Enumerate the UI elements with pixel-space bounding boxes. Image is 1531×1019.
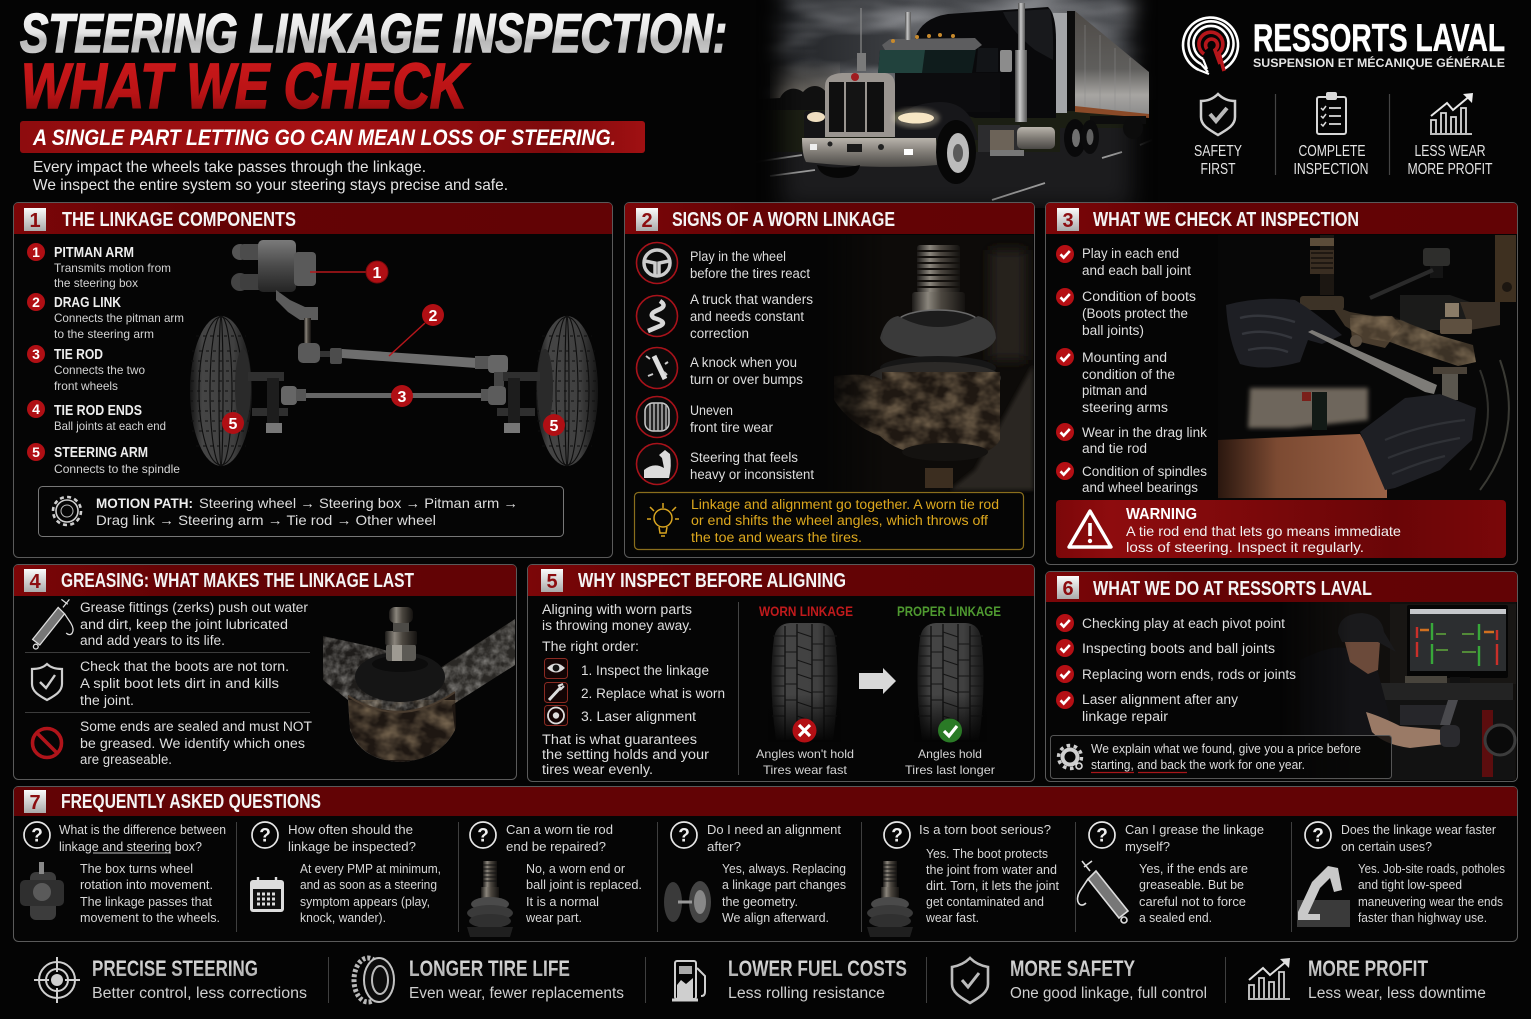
worn tire comparison: Tires wear fast <box>763 763 848 777</box>
faq 1: rotation into movement. <box>80 877 213 892</box>
faq 6 <box>1078 822 1264 925</box>
step 1: 1. Inspect the linkage <box>581 663 709 678</box>
faq 5: Is a torn boot serious? <box>919 822 1051 837</box>
worn tire comparison: WORN LINKAGE <box>759 603 853 619</box>
component list: Connects the two <box>54 363 145 377</box>
header benefit: safety first: FIRST <box>1200 161 1236 178</box>
tip: sealed ends warning: are greaseable. <box>80 752 172 767</box>
header photo: truck on highway <box>766 0 1149 208</box>
faq 6: careful not to force <box>1139 894 1246 909</box>
symptom: play in the wheel: Play in the wheel <box>690 249 786 264</box>
panel 3 header: 3 <box>1062 210 1074 232</box>
tip: sealed ends warning: be greased. We identify which ones <box>80 736 305 751</box>
component list: Ball joints at each end <box>54 419 166 433</box>
checklist: and each ball joint <box>1082 263 1191 278</box>
steering linkage diagram <box>190 240 598 466</box>
faq 3: end be repaired? <box>506 839 606 854</box>
faq 4: We align afterward. <box>722 910 829 925</box>
left text: That is what guarantees <box>542 732 697 747</box>
bottom benefit: lower fuel costs: Less rolling resistance <box>728 985 885 1002</box>
symptom: wanders: A truck that wanders <box>690 292 813 307</box>
component list: to the steering arm <box>54 327 154 341</box>
component list: front wheels <box>54 379 118 393</box>
services list: Laser alignment after any <box>1082 692 1238 707</box>
header benefit: complete inspection: INSPECTION <box>1294 161 1368 178</box>
panel 2 header: 2 <box>641 210 653 232</box>
services list: linkage repair <box>1082 709 1169 724</box>
tip: grease fittings: and add years to its life. <box>80 633 225 648</box>
faq 6: greaseable. But be <box>1139 877 1244 892</box>
faq 3: ball joint is replaced. <box>526 877 642 892</box>
tip: grease fittings <box>33 599 309 649</box>
component list: 2 <box>32 294 40 310</box>
panel 4: greasing <box>14 564 516 780</box>
step 1 <box>544 658 709 678</box>
bottom benefit: lower fuel costs: LOWER FUEL COSTS <box>728 956 907 981</box>
symptom: heavy steering: Steering that feels <box>690 450 798 465</box>
faq 2: At every PMP at minimum, <box>300 861 441 876</box>
checklist: Condition of boots <box>1082 289 1196 304</box>
header benefit: safety first: SAFETY <box>1194 143 1242 160</box>
worn tire comparison <box>756 603 854 777</box>
panel 2 header <box>625 203 1034 234</box>
panel 4 header: GREASING: WHAT MAKES THE LINKAGE LAST <box>61 569 414 592</box>
logo <box>1183 17 1505 74</box>
tip: sealed ends warning <box>32 719 312 767</box>
faq 7: faster than highway use. <box>1358 910 1487 925</box>
symptom: knock <box>636 348 803 388</box>
faq 2: How often should the <box>288 822 413 837</box>
grease joint photo <box>320 607 516 765</box>
panel 6 header: WHAT WE DO AT RESSORTS LAVAL <box>1093 577 1372 600</box>
ball joint photo <box>825 235 1033 491</box>
component list: STEERING ARM <box>54 445 148 461</box>
logo: SUSPENSION ET MÉCANIQUE GÉNÉRALE <box>1253 57 1505 70</box>
proper tire comparison <box>897 603 1001 777</box>
panel 7 header: FREQUENTLY ASKED QUESTIONS <box>61 790 321 813</box>
panel 4 header: 4 <box>29 571 41 593</box>
panel 4 header <box>14 565 516 596</box>
services list: Inspecting boots and ball joints <box>1082 641 1275 656</box>
faq 4: Do I need an alignment <box>707 822 841 837</box>
bottom benefit: more profit: Less wear, less downtime <box>1308 985 1486 1002</box>
intro text: Every impact the wheels take passes through the linkage. <box>33 159 426 176</box>
callout: linkage and alignment: the toe and wears the tires. <box>691 530 862 545</box>
faq 4: Yes, always. Replacing <box>722 861 846 876</box>
faq 6: a sealed end. <box>1139 910 1212 925</box>
motion path box: Steering wheel → Steering box → Pitman arm → <box>199 495 518 511</box>
warning box: A tie rod end that lets go means immediate <box>1126 523 1401 539</box>
panel 2 header: SIGNS OF A WORN LINKAGE <box>672 208 895 231</box>
faq 3: Can a worn tie rod <box>506 822 613 837</box>
warning box: WARNING <box>1126 506 1197 523</box>
headlights <box>892 108 940 128</box>
left text <box>542 602 710 777</box>
faq 7: Yes. Job-site roads, potholes <box>1358 861 1505 876</box>
bottom benefit: longer tire life: Even wear, fewer replacements <box>409 985 624 1002</box>
steering linkage diagram: 3 <box>398 389 407 406</box>
panel 7 header <box>14 787 1517 816</box>
worn tire comparison: Angles won't hold <box>756 747 854 761</box>
header benefit: less wear more profit: MORE PROFIT <box>1408 161 1493 178</box>
component list: 4 <box>32 401 40 417</box>
tip: check boots: the joint. <box>80 693 134 708</box>
faq 7: maneuvering wear the ends <box>1358 894 1503 909</box>
services list: Checking play at each pivot point <box>1082 616 1285 631</box>
left text: Aligning with worn parts <box>542 602 692 617</box>
left text: The right order: <box>542 639 639 654</box>
checklist: and tie rod <box>1082 441 1147 456</box>
faq 4 <box>664 822 846 925</box>
panel 3 header: WHAT WE CHECK AT INSPECTION <box>1093 208 1359 231</box>
bottom benefit: precise steering: Better control, less corrections <box>92 985 307 1002</box>
trailer <box>1075 11 1149 116</box>
component list: Connects to the spindle <box>54 462 180 476</box>
tip: sealed ends warning: Some ends are sealed and must NOT <box>80 719 312 734</box>
proper tire comparison: Tires last longer <box>905 763 995 777</box>
symptom: play in the wheel: before the tires react <box>690 266 810 281</box>
checklist: ball joints) <box>1082 323 1144 338</box>
faq 5 <box>867 822 1059 937</box>
bottom benefit: more profit <box>1248 956 1486 1002</box>
header benefit: complete inspection: COMPLETE <box>1298 143 1366 160</box>
checklist: steering arms <box>1082 400 1168 415</box>
symptom: uneven wear: front tire wear <box>690 420 774 435</box>
callout: linkage and alignment: Linkage and alignment go together. A worn tie rod <box>691 497 999 512</box>
faq 4: after? <box>707 839 741 854</box>
faq 6: Yes, if the ends are <box>1139 861 1248 876</box>
step 2 <box>544 682 725 702</box>
steering linkage diagram: 1 <box>373 265 382 282</box>
faq 4: a linkage part changes <box>722 877 846 892</box>
left text: is throwing money away. <box>542 618 692 633</box>
panel 1 header: THE LINKAGE COMPONENTS <box>62 208 296 231</box>
warning box: loss of steering. Inspect it regularly. <box>1126 539 1364 555</box>
left text: tires wear evenly. <box>542 762 653 777</box>
faq 7: on certain uses? <box>1341 839 1432 854</box>
warning box <box>1056 500 1506 558</box>
callout: linkage and alignment <box>634 492 1024 550</box>
panel 5 header <box>528 565 1034 596</box>
faq 2: symptom appears (play, <box>300 894 430 909</box>
symptom: wanders <box>636 292 813 341</box>
title: STEERING LINKAGE INSPECTION: <box>20 2 727 64</box>
checklist: Wear in the drag link <box>1082 425 1207 440</box>
checklist: condition of the <box>1082 367 1175 382</box>
faq 3: It is a normal <box>526 894 599 909</box>
bottom benefit: longer tire life <box>354 956 624 1002</box>
header benefit: safety first <box>1194 94 1242 178</box>
faq 2: knock, wander). <box>300 910 386 925</box>
panel 5 header: 5 <box>546 571 558 593</box>
panel 6 header <box>1046 572 1517 602</box>
checklist: Play in each end <box>1082 246 1179 261</box>
component list <box>27 243 184 476</box>
component list: PITMAN ARM <box>54 245 134 261</box>
panel 1: the linkage components <box>14 202 612 558</box>
panel 7: frequently asked questions <box>14 786 1518 942</box>
bottom benefit: precise steering: PRECISE STEERING <box>92 956 258 981</box>
wheels and tank <box>936 120 976 184</box>
faq 5: wear fast. <box>925 910 979 925</box>
bottom benefit: more safety: MORE SAFETY <box>1010 956 1135 981</box>
component list: Transmits motion from <box>54 261 171 275</box>
grille <box>825 73 895 137</box>
panel 2: signs of a worn linkage <box>624 202 1034 558</box>
bottom benefit: more safety <box>952 956 1207 1003</box>
panel 1 header: 1 <box>29 210 41 232</box>
intro text: We inspect the entire system so your steering stays precise and safe. <box>33 177 508 194</box>
steering linkage diagram: 2 <box>429 308 438 325</box>
tip: grease fittings: Grease fittings (zerks) push out water <box>80 600 309 615</box>
checklist: Mounting and <box>1082 350 1167 365</box>
inspection photo <box>1218 235 1516 500</box>
header benefit: less wear more profit: LESS WEAR <box>1414 143 1486 160</box>
symptom: wanders: correction <box>690 326 749 341</box>
faq 5: the joint from water and <box>926 862 1057 877</box>
bottom benefit: more safety: One good linkage, full control <box>1010 985 1207 1002</box>
faq 6: myself? <box>1125 839 1170 854</box>
panel 5 header: WHY INSPECT BEFORE ALIGNING <box>578 569 846 592</box>
motion path box <box>38 486 564 536</box>
checklist <box>1056 245 1207 495</box>
symptom: knock: turn or over bumps <box>690 372 803 387</box>
bottom benefit: precise steering <box>34 956 307 1003</box>
component list: TIE ROD ENDS <box>54 403 142 419</box>
faq 2: and as soon as a steering <box>300 877 437 892</box>
title: WHAT WE CHECK <box>21 50 471 122</box>
tip: check boots: Check that the boots are not torn. <box>80 659 289 674</box>
faq 3: No, a worn end or <box>526 861 626 876</box>
bottom benefit: lower fuel costs <box>672 956 907 1002</box>
header benefit: less wear more profit <box>1408 93 1493 178</box>
bottom benefit: more profit: MORE PROFIT <box>1308 956 1428 981</box>
step 3: 3. Laser alignment <box>581 709 696 724</box>
symptom: play in the wheel <box>636 242 810 284</box>
panel 3 header <box>1046 203 1517 234</box>
symptom: uneven wear <box>636 396 774 438</box>
panel 6 header: 6 <box>1062 578 1074 600</box>
tip: check boots: A split boot lets dirt in and kills <box>80 676 279 691</box>
symptom: uneven wear: Uneven <box>690 403 733 418</box>
faq 5: Yes. The boot protects <box>926 846 1048 861</box>
left text: the setting holds and your <box>542 747 710 762</box>
component list: 3 <box>32 346 40 362</box>
panel 7 header: 7 <box>29 792 41 814</box>
cab and sleeper <box>915 7 1056 118</box>
header benefit: complete inspection <box>1294 92 1368 178</box>
tip: grease fittings: and dirt, keep the joint lubricated <box>80 617 288 632</box>
faq 2: linkage be inspected? <box>288 839 416 854</box>
callouts <box>310 272 425 356</box>
mechanic photo <box>1317 602 1516 780</box>
faq 7: and tight low-speed <box>1358 877 1462 892</box>
faq 1: movement to the wheels. <box>80 910 220 925</box>
motion path box: MOTION PATH: <box>96 495 193 511</box>
faq 1 <box>20 822 226 925</box>
symptom: heavy steering: heavy or inconsistent <box>690 467 814 482</box>
component list: Connects the pitman arm <box>54 311 184 325</box>
guarantee box: We explain what we found, give you a price before <box>1091 742 1361 756</box>
callout: linkage and alignment: or end shifts the wheel angles, which throws off <box>691 513 988 528</box>
arrow <box>859 668 896 694</box>
step 3 <box>544 706 696 726</box>
bottom benefit: longer tire life: LONGER TIRE LIFE <box>409 956 570 981</box>
faq 5: get contaminated and <box>926 894 1044 909</box>
guarantee box <box>1050 736 1392 778</box>
panel 5: why inspect before aligning <box>528 564 1034 782</box>
step 2: 2. Replace what is worn <box>581 686 725 701</box>
faq 4: the geometry. <box>722 894 798 909</box>
guarantee box: starting, and back the work for one year. <box>1091 758 1305 772</box>
symptom: heavy steering <box>636 444 814 484</box>
component list: 1 <box>32 244 40 260</box>
component list: DRAG LINK <box>54 295 121 311</box>
faq 6: Can I grease the linkage <box>1125 822 1264 837</box>
faq 7: Does the linkage wear faster <box>1341 822 1497 837</box>
proper tire comparison: Angles hold <box>918 747 982 761</box>
panel 1 header <box>14 203 612 234</box>
component list: 5 <box>32 444 40 460</box>
steering linkage diagram: 5 <box>229 416 238 433</box>
faq 1: The box turns wheel <box>80 861 193 876</box>
faq 3 <box>467 822 642 937</box>
subtitle banner: A SINGLE PART LETTING GO CAN MEAN LOSS OF STEERING. <box>32 125 616 150</box>
panel 6: what we do at ressorts laval <box>1046 572 1518 782</box>
steering linkage diagram: 5 <box>550 418 559 435</box>
symptom: knock: A knock when you <box>690 355 797 370</box>
tip: check boots <box>32 659 289 708</box>
component list: the steering box <box>54 276 138 290</box>
checklist: pitman and <box>1082 383 1147 398</box>
faq 3: wear part. <box>525 910 582 925</box>
title <box>20 2 727 122</box>
checklist: (Boots protect the <box>1082 306 1188 321</box>
services list <box>1056 614 1296 724</box>
services list: Replacing worn ends, rods or joints <box>1082 667 1296 682</box>
bumper <box>802 138 937 167</box>
faq 1: What is the difference between <box>59 822 226 837</box>
faq 1: The linkage passes that <box>80 894 212 909</box>
faq 2 <box>250 822 441 925</box>
faq 1: linkage and steering box? <box>59 839 202 854</box>
symptom: wanders: and needs constant <box>690 309 804 324</box>
faq 7 <box>1297 822 1505 927</box>
steering box <box>231 240 318 320</box>
intro text <box>33 159 508 194</box>
motion path box: Drag link → Steering arm → Tie rod → Other wheel <box>96 512 436 528</box>
checklist: and wheel bearings <box>1082 480 1198 495</box>
component list: TIE ROD <box>54 347 103 363</box>
checklist: Condition of spindles <box>1082 464 1207 479</box>
proper tire comparison: PROPER LINKAGE <box>897 603 1001 619</box>
panel 3: what we check at inspection <box>1046 202 1518 564</box>
faq 5: dirt. Torn, it lets the joint <box>926 878 1059 893</box>
